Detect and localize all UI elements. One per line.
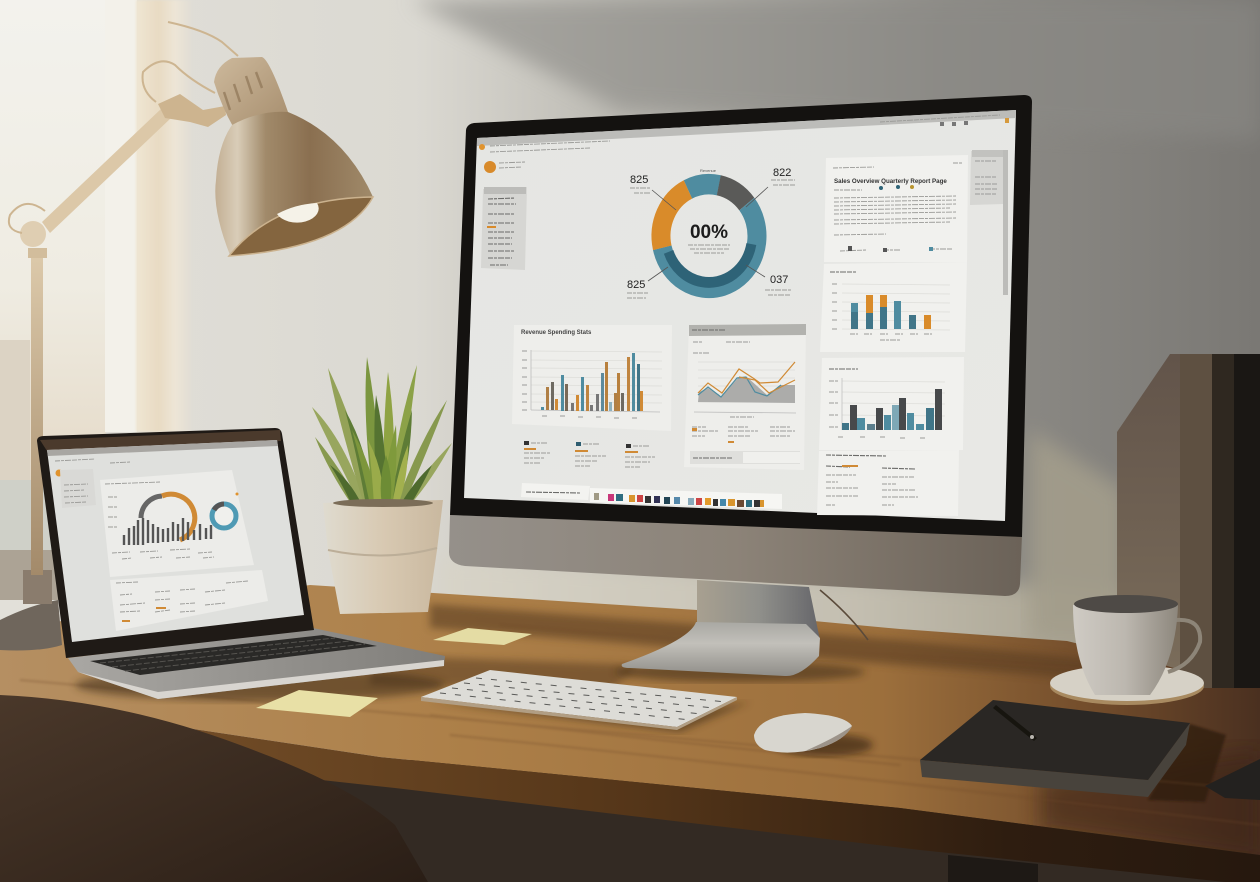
panel: summary text bbox=[824, 155, 968, 262]
monitor frame bbox=[450, 95, 1032, 537]
lamp shade bbox=[214, 57, 373, 256]
panel: data table bbox=[817, 450, 959, 516]
lamp pole and arm bbox=[9, 22, 238, 575]
panel: stacked bar chart bbox=[820, 262, 967, 352]
dock bar bbox=[521, 483, 782, 509]
donut callouts: 825 bbox=[630, 174, 648, 186]
mouse bbox=[754, 713, 873, 756]
laptop lower panel bbox=[110, 570, 268, 631]
external keyboard bbox=[421, 670, 750, 732]
legends under bar chart bbox=[524, 441, 655, 467]
plant pot bbox=[323, 499, 443, 614]
donut callouts: 822 bbox=[773, 167, 791, 179]
monitor bbox=[449, 95, 1032, 596]
screen content bbox=[477, 110, 1016, 516]
window with curtain bbox=[0, 0, 192, 600]
lamp base bbox=[0, 570, 62, 650]
donut chart bbox=[627, 163, 795, 309]
monitor stand bbox=[615, 580, 868, 682]
panel: grouped bar chart bbox=[512, 325, 672, 431]
panel: dark bar chart bbox=[819, 357, 964, 450]
donut callouts: 825 bbox=[627, 279, 645, 291]
panel: summary text: Sales Overview Quarterly Report Page bbox=[834, 178, 947, 185]
panel: grouped bar chart: Revenue Spending Stats bbox=[521, 330, 592, 336]
laptop lid bbox=[37, 428, 314, 658]
below desk shadow area bbox=[0, 760, 1260, 882]
sticky note near stand bbox=[433, 628, 532, 645]
sidebar bbox=[481, 161, 527, 270]
potted plant bbox=[312, 357, 452, 614]
donut callouts: 037 bbox=[770, 274, 788, 286]
laptop screen bbox=[47, 440, 304, 642]
binders bbox=[1117, 354, 1260, 688]
donut callouts bbox=[627, 167, 795, 298]
donut center value: 00% bbox=[690, 222, 728, 243]
laptop base bbox=[68, 628, 445, 699]
plant leaves bbox=[312, 357, 452, 505]
monitor chin bbox=[449, 515, 1022, 596]
laptop sidebar bbox=[56, 469, 96, 508]
coffee cup and saucer bbox=[1050, 595, 1204, 705]
chair back bbox=[0, 695, 428, 882]
monitor screen bbox=[464, 110, 1016, 521]
phone bbox=[1205, 759, 1260, 800]
panel: line chart bbox=[684, 324, 806, 470]
notebook and pen bbox=[920, 700, 1190, 797]
browser toolbar bbox=[477, 110, 1016, 152]
pen bbox=[993, 705, 1037, 741]
sticky note near laptop bbox=[256, 690, 378, 717]
desk lamp bbox=[0, 22, 373, 650]
laptop keyboard bbox=[90, 635, 377, 675]
laptop bbox=[37, 428, 445, 701]
desk bbox=[0, 585, 1260, 882]
right mini panel and scrollbar bbox=[970, 150, 1008, 295]
donut callouts: Revenue bbox=[700, 168, 717, 173]
laptop chart panel bbox=[100, 470, 254, 577]
